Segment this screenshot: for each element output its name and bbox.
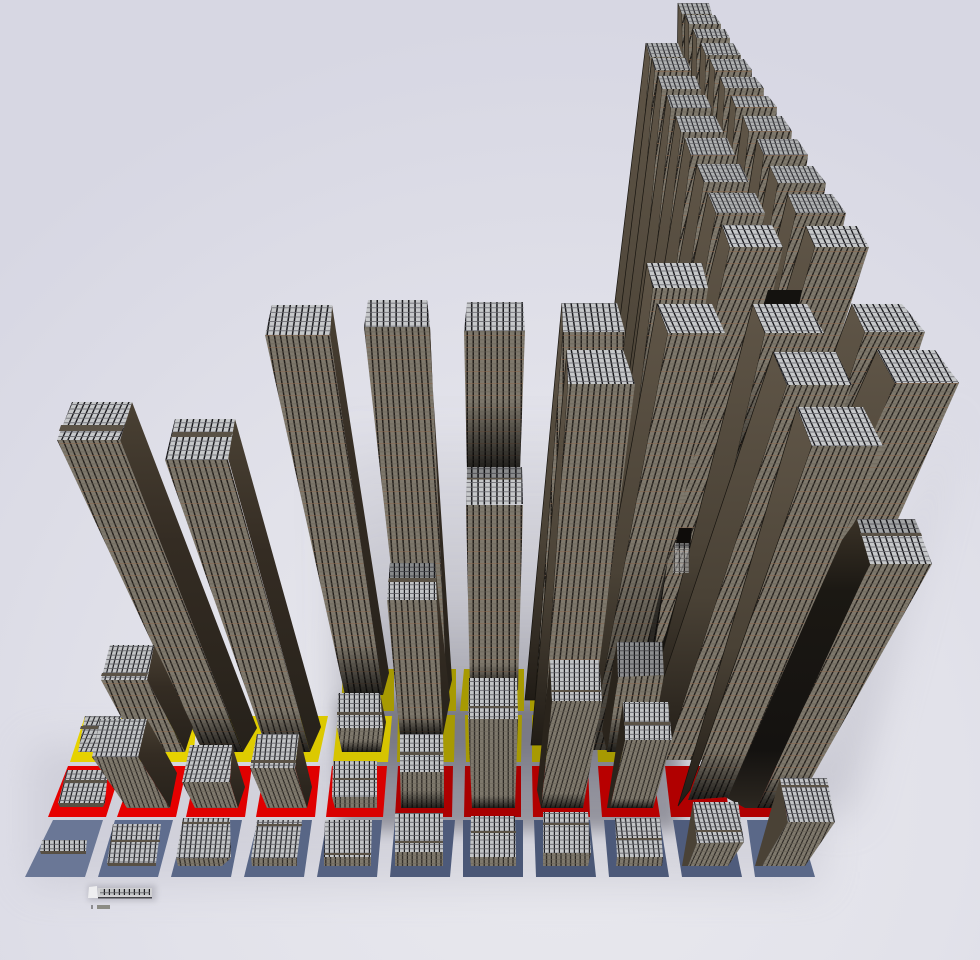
stack: row 2, third column [182, 745, 245, 808]
tower group: rear column [572, 43, 783, 660]
floor tiles: blue row [25, 820, 815, 877]
tower: row 3, third column stack [337, 693, 386, 752]
tower: row 3, sixth column [531, 350, 635, 745]
dark face beside front right tower [725, 519, 870, 808]
tower: row 4, ninth column [645, 304, 824, 720]
stack: front row seventh column [470, 816, 516, 866]
stack: front row eighth column [543, 812, 591, 866]
floor tiles: yellow row [70, 715, 655, 762]
stack: row 2, first column [58, 770, 108, 807]
stack: row 3, first column [78, 716, 122, 752]
tower: row 2, seventh column [468, 678, 518, 808]
stack: row 2, sixth column [400, 734, 444, 808]
stack: front row sixth column [395, 813, 443, 866]
tower: row 4, fifth column [464, 302, 525, 470]
tower: row 3, fifth column [466, 467, 523, 690]
floor tiles: far yellow row [341, 669, 640, 711]
stack: row 3, eighth column [602, 642, 664, 752]
tower: row 3, fourth column with tier [387, 563, 450, 735]
tower: row 2, ninth column [607, 702, 672, 808]
tower: row 4, third column [265, 305, 389, 695]
dark gap behind ninth column [640, 290, 802, 720]
stack: front row eleventh column [755, 778, 835, 866]
stack: row 2, fifth column [332, 761, 377, 808]
tower: row 4, right column [700, 304, 925, 720]
tall tower: first [57, 402, 257, 752]
tower group: far right rear column [670, 3, 869, 660]
stack: front row second column [107, 824, 161, 866]
icon: truck for scale [88, 885, 156, 909]
stack: front row ninth column [615, 818, 663, 866]
soft floor shadows [30, 400, 960, 885]
small peeking stack [673, 528, 692, 573]
tower: row 3, right column [730, 350, 959, 760]
stack: front row tenth column [682, 802, 744, 866]
tower: row 4, eighth column [578, 304, 725, 750]
tower: row 4, fourth column [364, 300, 452, 700]
stack: front row fifth column [324, 820, 372, 866]
tall tower: second [165, 419, 321, 752]
tower: row 2, eighth column [537, 660, 602, 808]
tower: row 5, eighth column [590, 263, 708, 680]
stack: front row fourth column [251, 820, 302, 866]
stack: row 3, second column [101, 645, 193, 752]
tower: row 2, eleventh column tall [757, 519, 932, 808]
flat stack: front row first column [40, 840, 87, 854]
tower: row 4, sixth column [525, 303, 625, 705]
stack: front row third column [176, 818, 231, 866]
stack: row 2, second column [92, 719, 177, 808]
tower: row 3, ninth column [636, 352, 852, 760]
stack: row 2, fourth column [250, 734, 312, 808]
tower: row 2, tenth column tall [678, 407, 883, 806]
floor tiles: red row [48, 766, 800, 817]
